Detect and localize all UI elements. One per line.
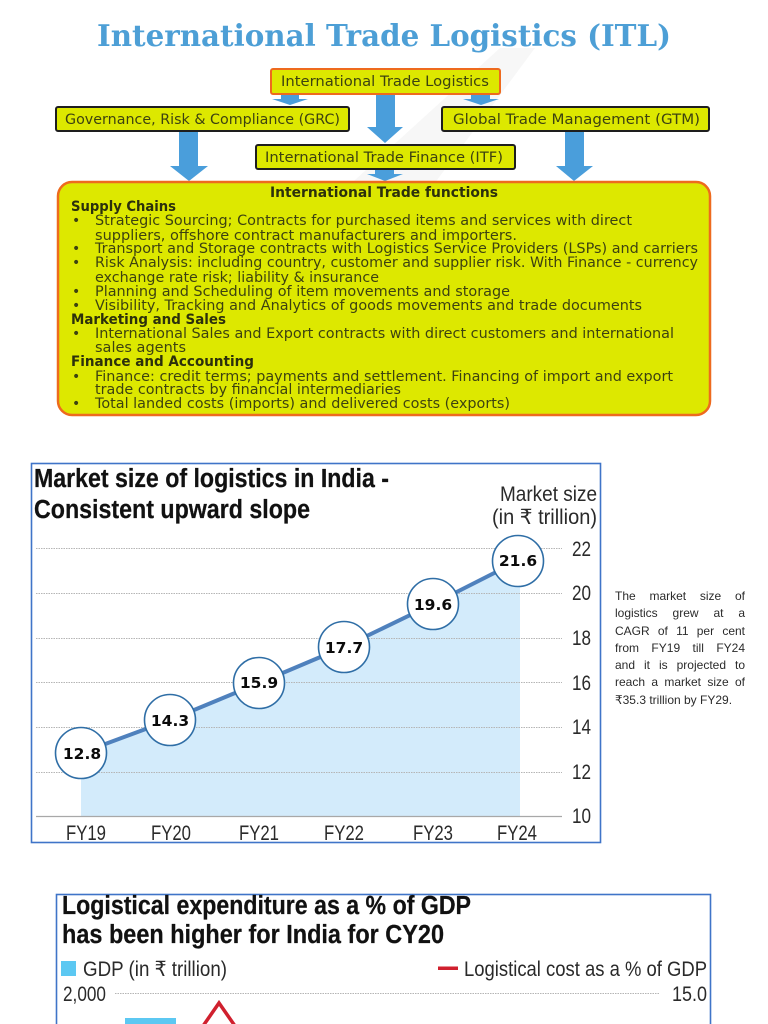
x axis labels: FY22 [324, 822, 364, 845]
arrow: GTM to functions [556, 131, 593, 181]
section: Supply Chains: Supply Chains [71, 199, 176, 215]
axis title: Market size [500, 483, 597, 506]
section: Finance and Accounting: Total landed costs (imports) and delivered costs (exports) [94, 396, 510, 412]
text block: market size commentary [615, 589, 746, 707]
chart heading: Market size of logistics in India - [34, 465, 389, 493]
data point: FY21 15.9 [234, 658, 284, 708]
box: GTM [442, 107, 709, 131]
section: Supply Chains: Strategic Sourcing; Contracts for purchased items and services with direct [95, 213, 633, 229]
box: GTM: Global Trade Management (GTM) [453, 112, 700, 128]
arrow: GRC to functions [170, 131, 208, 181]
section: Finance and Accounting: Finance: credit terms; payments and settlement. Financing of import and export [95, 369, 674, 385]
box: International Trade Logistics: International Trade Logistics [281, 74, 489, 90]
area fill [81, 561, 520, 816]
panel: market size chart [32, 464, 600, 845]
section: Marketing and Sales: • [72, 326, 80, 342]
section: Supply Chains: • [72, 255, 80, 271]
title: International Trade Logistics (ITL) [97, 19, 671, 54]
arrow: ITL to ITF [367, 95, 403, 143]
panel: International Trade functions [58, 182, 710, 415]
chart heading [34, 465, 389, 524]
section: Supply Chains: Planning and Scheduling of item movements and storage [95, 284, 510, 300]
section: Finance and Accounting: Finance and Accounting [71, 354, 254, 370]
section: Supply Chains: suppliers, offshore contract manufacturers and importers. [95, 228, 517, 244]
data point: FY19 12.8: 12.8 [63, 745, 101, 763]
data point: FY19 12.8 [56, 728, 106, 778]
y axis labels: 12 [572, 761, 591, 784]
section: Marketing and Sales: International Sales and Export contracts with direct customers and international [95, 326, 674, 342]
box: GRC: Governance, Risk & Compliance (GRC) [65, 112, 340, 128]
legend: logistical cost: Logistical cost as a % of GDP [464, 958, 707, 981]
box: GRC [56, 107, 349, 131]
right axis label: 15.0 [672, 983, 707, 1006]
text block: market size commentary: and it is projected to [615, 658, 745, 672]
section: Supply Chains: • [72, 241, 80, 257]
section: Supply Chains: exchange rate risk; liability & insurance [95, 270, 379, 286]
panel heading: International Trade functions [270, 185, 498, 201]
data point: FY21 15.9: 15.9 [240, 674, 278, 692]
section: Supply Chains: • [72, 213, 80, 229]
arrow: ITL to GRC [272, 95, 308, 105]
y axis labels [572, 538, 591, 828]
box: ITF [256, 145, 515, 169]
left axis label: 2,000 [63, 983, 106, 1006]
x axis labels: FY24 [497, 822, 537, 845]
section: Supply Chains: Transport and Storage contracts with Logistics Service Providers (LSPs) and carriers [94, 241, 698, 257]
GDP bar [125, 1018, 176, 1024]
chart heading: Consistent upward slope [34, 496, 310, 524]
y axis labels: 20 [572, 582, 591, 605]
section: Supply Chains [71, 199, 698, 314]
text block: market size commentary: from FY19 till FY24 [615, 641, 745, 655]
chart heading [62, 892, 471, 949]
data point: FY22 17.7: 17.7 [325, 639, 363, 657]
data point: FY23 19.6 [408, 578, 458, 630]
data point: FY24 21.6: 21.6 [499, 552, 537, 570]
text block: market size commentary: logistics grew at a [615, 606, 745, 620]
flow diagram: trade logistics hierarchy [56, 69, 709, 181]
section: Supply Chains: • [72, 298, 80, 314]
arrow: ITF to functions [367, 169, 403, 181]
data point: FY23 19.6: 19.6 [414, 596, 452, 614]
y axis labels: 22 [572, 538, 591, 561]
text block: market size commentary: reach a market size of [615, 675, 745, 689]
section: Marketing and Sales [71, 312, 674, 356]
data point: FY24 21.6 [492, 536, 544, 586]
y axis labels: 16 [572, 672, 591, 695]
legend: GDP: GDP (in ₹ trillion) [83, 958, 227, 981]
logistical cost line [203, 1003, 235, 1024]
x axis labels: FY23 [413, 822, 453, 845]
section: Marketing and Sales: sales agents [95, 340, 186, 356]
text block: market size commentary: The market size of [615, 589, 745, 603]
chart heading: has been higher for India for CY20 [62, 921, 444, 949]
x axis labels: FY20 [151, 822, 191, 845]
x axis labels: FY21 [239, 822, 279, 845]
axis title [492, 483, 597, 529]
arrow: ITL to GTM [463, 95, 499, 105]
data point: FY22 17.7 [318, 622, 370, 672]
x axis labels [66, 822, 537, 845]
box: International Trade Logistics [271, 69, 500, 94]
section: Marketing and Sales: Marketing and Sales [71, 312, 226, 328]
section: Finance and Accounting: • [72, 369, 80, 385]
chart heading: Logistical expenditure as a % of GDP [62, 892, 471, 920]
panel: logistical expenditure chart [56, 892, 710, 1024]
y axis labels: 10 [572, 805, 591, 828]
y axis labels: 14 [572, 716, 591, 739]
section: Finance and Accounting [71, 354, 674, 412]
box: ITF: International Trade Finance (ITF) [265, 150, 503, 166]
section: Supply Chains: Visibility, Tracking and Analytics of goods movements and trade documents [95, 298, 642, 314]
text block: market size commentary: CAGR of 11 per cent [615, 624, 745, 638]
section: Finance and Accounting: trade contracts by financial intermediaries [95, 382, 401, 398]
data point: FY20 14.3: 14.3 [151, 712, 189, 730]
text block: market size commentary: ₹35.3 trillion by FY29. [615, 693, 732, 707]
section: Finance and Accounting: • [72, 396, 80, 412]
y axis labels: 18 [572, 627, 591, 650]
data point: FY20 14.3 [144, 694, 196, 746]
axis title: (in ₹ trillion) [492, 506, 597, 529]
trend line [81, 561, 518, 753]
x axis labels: FY19 [66, 822, 106, 845]
section: Supply Chains: • [72, 284, 80, 300]
section: Supply Chains: Risk Analysis: including country, customer and supplier risk. With Finance - currency [95, 255, 698, 271]
